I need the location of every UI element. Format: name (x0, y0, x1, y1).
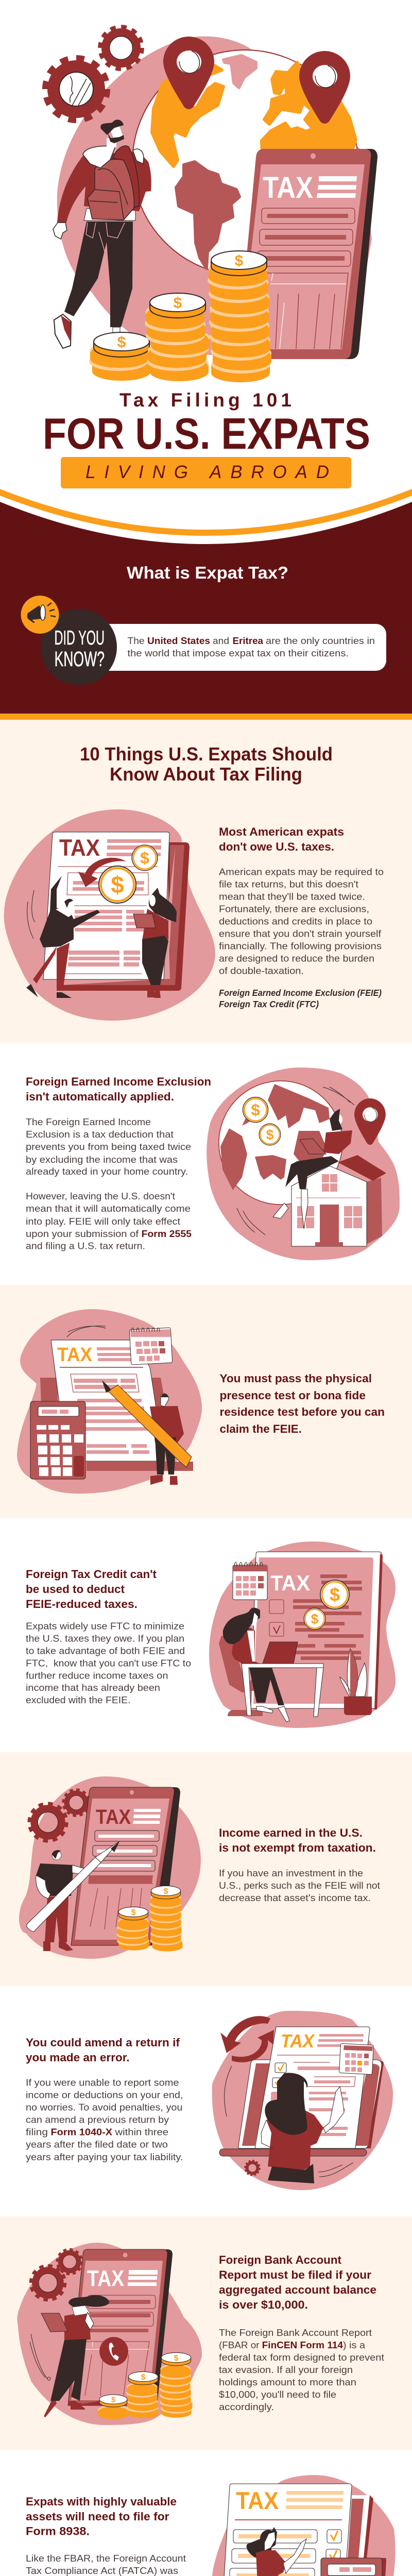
heading: Foreign Tax Credit can't (26, 1568, 157, 1581)
body text: decrease that asset's income tax. (219, 1893, 371, 1903)
main title: FOR U.S. EXPATS (43, 410, 370, 459)
body text: FinCEN Form 114 (262, 2340, 343, 2350)
did you know callout (21, 596, 386, 685)
illustration: woman working at desk with tax form (209, 1541, 396, 1728)
body text: The Foreign Bank Account Report (219, 2328, 372, 2338)
body text: accordingly. (219, 2402, 274, 2412)
illustration: tax form, calendar, calculator and pencil (17, 1309, 202, 1494)
illustration: two people with tax form (4, 809, 215, 1021)
body text: years after the filed date or two (26, 2139, 168, 2149)
illustration: man with pencil and tablet: TAX (96, 1806, 131, 1828)
body text: tax evasion. If all your foreign (219, 2365, 353, 2375)
body text (219, 867, 384, 976)
hero illustration: expat, globe, tablet and coins (45, 27, 377, 382)
body text: Exclusion is a tax deduction that (26, 1129, 174, 1140)
white pill with fact: the world that impose expat tax on their citizens. (128, 648, 349, 658)
icon: right location pin (299, 51, 350, 124)
body text: (FBAR or (219, 2340, 260, 2350)
body text: and filing a U.S. tax return. (26, 1241, 145, 1251)
dark circle badge: KNOW? (55, 647, 105, 671)
body text: mean that it will automatically come (26, 1204, 191, 1214)
body text: Tax Compliance Act (FATCA) was (26, 2566, 178, 2576)
body text: However, leaving the U.S. doesn't (26, 1191, 175, 1201)
body text: file tax returns, but this doesn't (219, 879, 358, 889)
heading: is over $10,000. (219, 2298, 308, 2311)
body text: FTC, know that you can't use FTC to (26, 1658, 191, 1668)
panel: tip 8 (25, 2475, 396, 2576)
heading: Expats with highly valuable (26, 2495, 177, 2508)
heading: presence test or bona fide (219, 1389, 366, 1402)
body text: income or deductions on your end, (26, 2090, 183, 2100)
panel: tip 5 (19, 1776, 380, 1959)
body text: of double-taxation. (219, 965, 304, 976)
illustration: woman working at desk with tax form: TAX (270, 1571, 310, 1595)
body text (26, 1117, 192, 1251)
heading: Foreign Earned Income Exclusion (26, 1075, 211, 1088)
heading: don't owe U.S. taxes. (219, 840, 334, 853)
heading: Income earned in the U.S. (219, 1826, 363, 1839)
body text: already taxed in your home country. (26, 1166, 188, 1177)
body text: excluded with the FEIE. (26, 1695, 131, 1705)
panel: tip 7 (17, 2243, 384, 2425)
body text: Fortunately, there are exclusions, (219, 904, 369, 914)
body text: ensure that you don't strain yourself (219, 928, 382, 939)
body text: further reduce income taxes on (26, 1670, 168, 1681)
body text: holdings amount to more than (219, 2377, 356, 2387)
body text (219, 2328, 384, 2412)
white pill with fact: and (213, 636, 229, 646)
pink background blob (57, 37, 372, 355)
heading: Report must be filed if your (219, 2268, 371, 2281)
body text: years after paying your tax liability. (26, 2152, 183, 2162)
heading (26, 2036, 180, 2064)
tablet with tax form (237, 149, 377, 359)
body text: into play. FEIE will only take effect (26, 1216, 180, 1227)
illustration: man with pencil and tablet (19, 1776, 201, 1959)
heading: Foreign Bank Account (219, 2253, 342, 2266)
expat with backpack (53, 120, 151, 348)
body text: deductions and credits in place to (219, 916, 372, 926)
curved divider and maroon section (0, 489, 412, 720)
body text: $10,000, you'll need to file (219, 2389, 336, 2400)
illustration: woman amending form on screen: TAX (281, 2030, 315, 2052)
icon: large gear (45, 58, 107, 120)
heading (26, 2495, 177, 2538)
panel: tip 2 (26, 1067, 400, 1260)
body text (26, 2077, 183, 2162)
body text (219, 1868, 380, 1903)
body text: to take advantage of both FEIE and (26, 1646, 185, 1656)
body text: ) is a (343, 2340, 366, 2350)
heading: isn't automatically applied. (26, 1090, 174, 1103)
panel: tip 6 (26, 2011, 393, 2190)
body text: by excluding the income that was (26, 1155, 178, 1165)
title block (43, 389, 370, 488)
heading: You must pass the physical (219, 1372, 372, 1385)
heading: You could amend a return if (26, 2036, 180, 2049)
provisions list: Foreign Tax Credit (FTC) (219, 999, 319, 1009)
panel: tip 4 (26, 1541, 396, 1728)
body text: are designed to reduce the burden (219, 953, 374, 963)
body text: American expats may be required to (219, 867, 384, 877)
panel: tip 1 (4, 809, 384, 1021)
panel: tip 3 (17, 1309, 385, 1494)
body text (26, 1621, 191, 1705)
body text: If you were unable to report some (26, 2077, 179, 2088)
body text: mean that they'll be taxed twice. (219, 891, 365, 902)
body text: income that has already been (26, 1683, 160, 1693)
body text: no worries. To avoid penalties, you (26, 2102, 182, 2112)
section heading: 10 things: 10 Things U.S. Expats Should (80, 743, 333, 765)
body text: Like the FBAR, the Foreign Account (26, 2553, 186, 2564)
illustration: woman on house with globe (207, 1067, 400, 1260)
illustration: woman with tax form, calculator and card (212, 2475, 396, 2576)
coin stack: small (89, 332, 151, 381)
icon: small gear (100, 27, 142, 69)
body text: U.S., perks such as the FEIE will not (219, 1880, 380, 1891)
heading: Form 8938. (26, 2524, 90, 2538)
body text: federal tax form designed to prevent (219, 2352, 384, 2363)
heading (219, 825, 344, 853)
title line 1: Tax Filing 101 (119, 389, 291, 411)
body text: can amend a previous return by (26, 2114, 169, 2125)
body text: If you have an investment in the (219, 1868, 363, 1878)
heading: assets will need to file for (26, 2510, 169, 2523)
white pill with fact (88, 624, 386, 671)
white pill with fact: The (128, 636, 144, 646)
heading: be used to deduct (26, 1583, 125, 1596)
heading (26, 1075, 211, 1103)
body text: The Foreign Earned Income (26, 1117, 151, 1127)
provisions list: Foreign Earned Income Exclusion (FEIE) (219, 988, 382, 998)
body text: upon your submission of (26, 1229, 139, 1239)
body text: prevents you from being taxed twice (26, 1142, 191, 1152)
body text: within three (114, 2127, 168, 2137)
coin stack: tall (208, 251, 271, 382)
heading: aggregated account balance (219, 2283, 376, 2296)
illustration: two people with tax form: TAX (59, 835, 100, 861)
subtitle banner (61, 457, 351, 488)
body text (26, 2553, 191, 2576)
body text: Form 1040-X (50, 2127, 112, 2137)
white pill with fact: Eritrea (233, 636, 264, 646)
heading: Most American expats (219, 825, 344, 838)
body text: the U.S. taxes they owe. If you plan (26, 1633, 184, 1643)
heading: FEIE-reduced taxes. (26, 1598, 138, 1611)
illustration: woman with tax form, calculator and card: TAX (236, 2487, 279, 2514)
section heading: 10 things: Know About Tax Filing (110, 764, 302, 785)
white pill with fact: United States (147, 636, 210, 646)
heading: you made an error. (26, 2051, 130, 2064)
body text: Expats widely use FTC to minimize (26, 1621, 184, 1631)
body text: Form 2555 (141, 1229, 192, 1239)
illustration: woman amending form on screen (212, 2011, 393, 2190)
section heading: 10 things (80, 743, 333, 785)
heading (219, 1826, 376, 1854)
heading (219, 1372, 385, 1435)
subtitle banner: LIVING ABROAD (85, 462, 329, 482)
icon: left location pin (163, 37, 214, 109)
illustration: man on phone with tablet and coins: TAX (87, 2266, 124, 2291)
tablet with tax form: TAX (263, 171, 313, 205)
heading: what is expat tax: What is Expat Tax? (127, 564, 288, 583)
heading (219, 2253, 376, 2311)
coin stack: medium (145, 293, 210, 381)
globe (132, 50, 358, 276)
body text: financially. The following provisions (219, 941, 382, 951)
provisions list (219, 988, 382, 1009)
white pill with fact: are the only countries in (266, 636, 375, 646)
icon: megaphone (21, 596, 59, 634)
heading: claim the FEIE. (219, 1422, 302, 1435)
dark circle badge (41, 609, 117, 685)
body text: filing (26, 2127, 48, 2137)
heading (26, 1568, 157, 1611)
illustration: tax form, calendar, calculator and pencil: TAX (57, 1344, 93, 1366)
heading: residence test before you can (219, 1405, 385, 1418)
heading: is not exempt from taxation. (219, 1841, 376, 1854)
illustration: man on phone with tablet and coins (17, 2243, 202, 2425)
dark circle badge: DID YOU (55, 627, 105, 649)
